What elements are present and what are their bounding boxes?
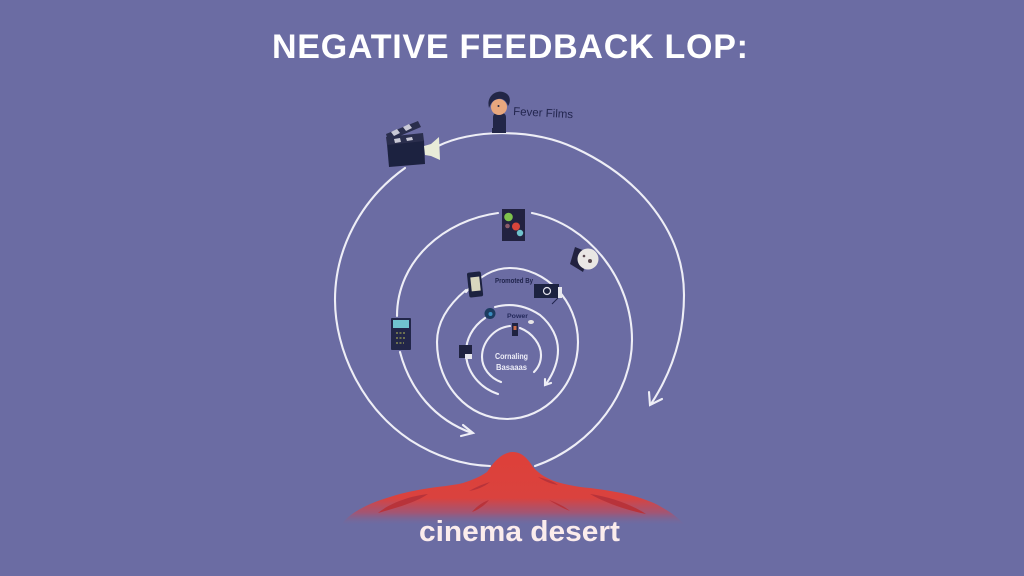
icon: person xyxy=(488,92,510,133)
icon: tiny phone xyxy=(512,323,518,336)
icon: small stacked squares xyxy=(459,345,472,359)
center label: Basaaas xyxy=(496,363,528,372)
label: ring three: Power xyxy=(507,313,528,320)
icon: clapperboard and projector xyxy=(386,121,440,167)
label: cinema desert: cinema desert xyxy=(419,516,620,548)
center label xyxy=(495,352,528,372)
inner ring: right side xyxy=(520,328,541,372)
third ring xyxy=(437,268,578,419)
inner ring: left side xyxy=(482,326,510,382)
icon: dark panel with coloured dots xyxy=(502,209,525,241)
label: fever films: Fever Films xyxy=(513,106,574,121)
outer arc: left side to the mountain xyxy=(335,168,490,466)
second ring: right side running to the mountain xyxy=(532,213,632,466)
icon: calculator xyxy=(391,318,411,350)
second ring: left side ending in arrow xyxy=(397,213,498,436)
label: ring two: Promoted By xyxy=(495,278,533,285)
icon: small camera xyxy=(534,284,562,304)
title: NEGATIVE FEEDBACK LOP: xyxy=(272,28,748,66)
icon: phone xyxy=(467,271,483,298)
icon: small white tag xyxy=(528,320,534,324)
fourth ring: right side with arrow xyxy=(495,305,558,385)
center label: Cornaling xyxy=(495,352,528,361)
icon: blue circle badge xyxy=(484,308,496,319)
red mountain: cinema desert xyxy=(342,452,684,524)
spiral loop arcs xyxy=(335,133,684,466)
icon: film reel xyxy=(570,247,598,272)
fourth ring: left side xyxy=(466,318,498,394)
outer arc: top to right, ending in arrow xyxy=(438,133,684,405)
